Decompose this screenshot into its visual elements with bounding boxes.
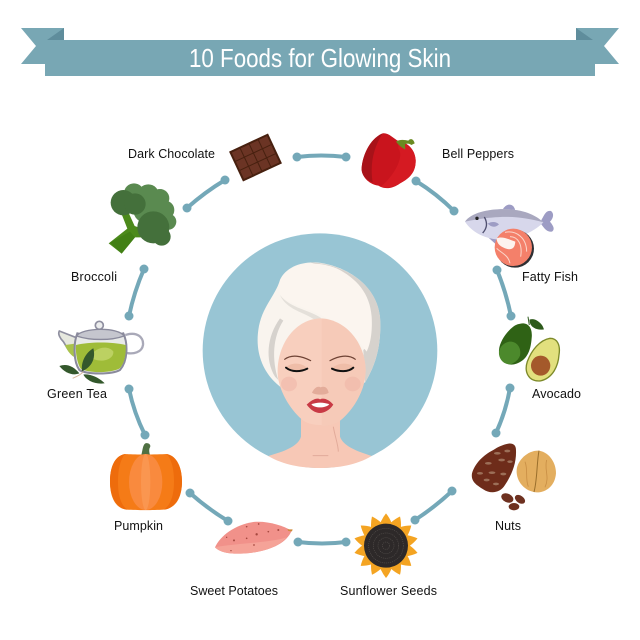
label: dark chocolate: Dark Chocolate xyxy=(128,147,215,161)
salmon steak xyxy=(496,230,534,268)
nose xyxy=(312,387,329,395)
teapot glass xyxy=(75,333,126,373)
central portrait xyxy=(203,233,437,468)
avocado xyxy=(499,317,559,381)
whole avocado xyxy=(499,323,532,365)
fatty fish xyxy=(465,205,554,268)
connector arcs xyxy=(124,152,516,546)
label: nuts: Nuts xyxy=(495,519,521,533)
cheeks xyxy=(281,377,361,391)
ribbon folds xyxy=(47,28,593,40)
nuts xyxy=(472,444,556,510)
pumpkin lobes xyxy=(110,454,182,510)
potato tip xyxy=(287,529,293,531)
eyelids xyxy=(286,364,354,371)
left ribbon tail xyxy=(21,28,64,64)
towel base xyxy=(258,262,380,387)
petals xyxy=(353,513,419,578)
bar xyxy=(229,133,282,182)
bell pepper xyxy=(362,133,416,188)
walnut xyxy=(517,451,556,492)
pepper body xyxy=(362,133,416,188)
label: broccoli: Broccoli xyxy=(71,270,117,284)
label: sunflower seeds: Sunflower Seeds xyxy=(340,584,437,598)
face xyxy=(278,318,366,425)
dark chocolate xyxy=(229,133,282,182)
green tea xyxy=(59,321,143,384)
pumpkin body xyxy=(110,454,182,510)
eyebrows xyxy=(285,356,355,361)
seed disc xyxy=(364,524,408,568)
pit xyxy=(531,356,550,376)
seeds xyxy=(500,491,527,510)
title banner xyxy=(21,28,619,76)
pepper stem xyxy=(396,139,415,150)
back florets xyxy=(124,183,176,230)
label: bell peppers: Bell Peppers xyxy=(442,147,514,161)
label: avocado: Avocado xyxy=(532,387,581,401)
right ribbon tail xyxy=(576,28,619,64)
front florets xyxy=(111,190,171,246)
tea liquid xyxy=(76,342,126,372)
broccoli stalk xyxy=(109,210,150,254)
tea leaves xyxy=(59,348,105,384)
pumpkin xyxy=(110,443,182,510)
tail and fins xyxy=(487,205,554,245)
potato body xyxy=(215,522,292,554)
neck and shoulders xyxy=(268,410,372,468)
pine cone xyxy=(472,444,516,492)
gill and eye xyxy=(483,217,487,233)
title: 10 Foods for Glowing Skin xyxy=(189,43,451,73)
avocado half xyxy=(526,338,559,381)
potato spots xyxy=(226,523,279,551)
lips xyxy=(307,399,333,413)
towel top fold xyxy=(279,264,372,352)
squares xyxy=(232,136,279,179)
fish body xyxy=(465,209,543,240)
neck shading xyxy=(313,427,338,456)
towel shadow xyxy=(310,262,380,383)
teapot handle xyxy=(125,334,143,353)
broccoli xyxy=(109,183,176,254)
cone scales xyxy=(477,450,513,485)
sunflower xyxy=(353,513,419,578)
label: fatty fish: Fatty Fish xyxy=(522,270,578,284)
label: pumpkin: Pumpkin xyxy=(114,519,163,533)
ribbon band xyxy=(45,40,595,76)
spout xyxy=(59,331,78,357)
sweet potato xyxy=(215,522,293,554)
stem xyxy=(141,443,150,455)
label: sweet potatoes: Sweet Potatoes xyxy=(190,584,278,598)
label: green tea: Green Tea xyxy=(47,387,107,401)
blue circle xyxy=(203,233,437,468)
eyelashes xyxy=(286,368,353,371)
lid xyxy=(95,321,103,329)
leaf xyxy=(528,317,543,329)
